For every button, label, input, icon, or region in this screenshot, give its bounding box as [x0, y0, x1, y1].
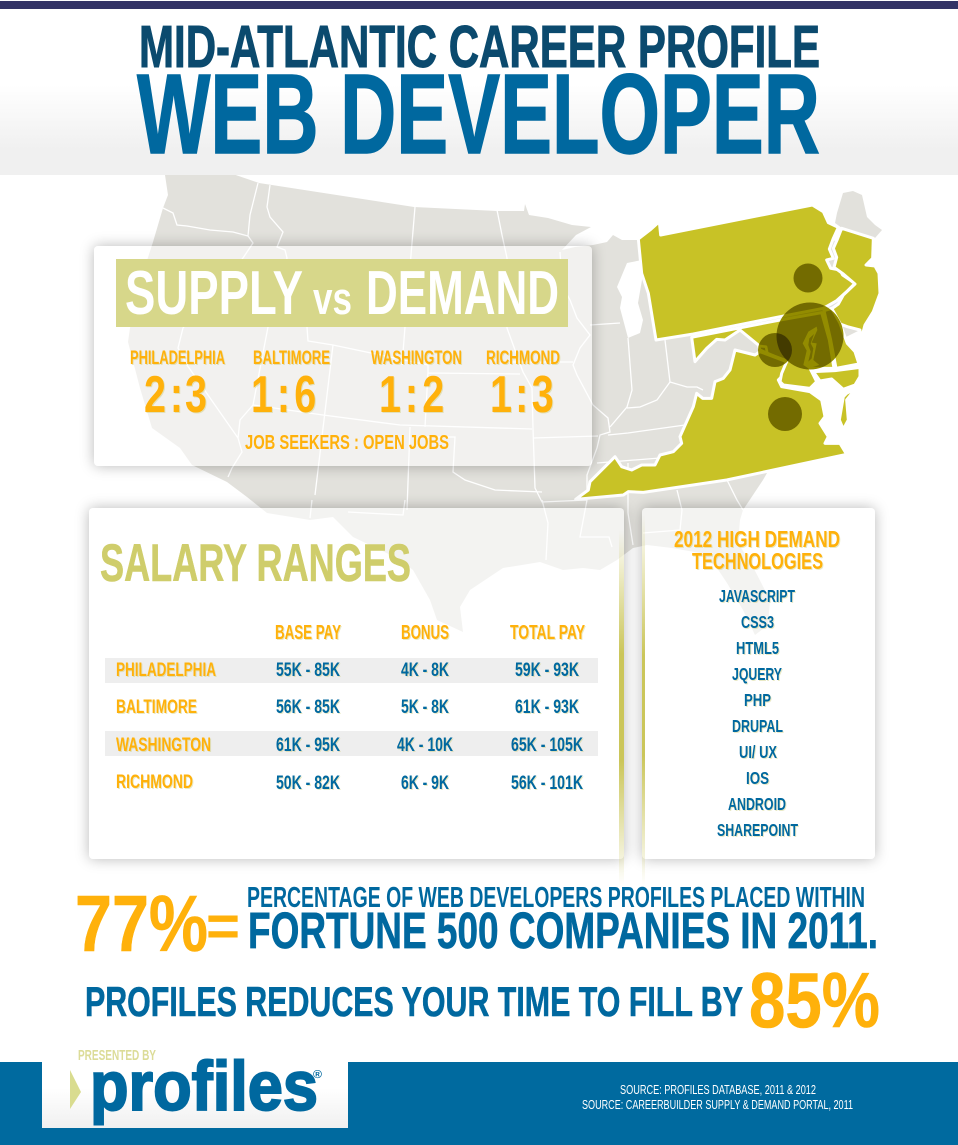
heading bar: SUPPLY: [125, 259, 303, 328]
salary table: BASE PAY: [275, 622, 341, 644]
heading: TECHNOLOGIES: [692, 548, 823, 574]
logo box: [42, 1062, 348, 1128]
presented by logo: ®: [313, 1069, 322, 1081]
salary table: 65K - 105K: [511, 735, 583, 756]
salary table: 61K - 93K: [515, 697, 579, 718]
technology list: JQUERY: [732, 664, 782, 684]
stat: 77 percent: [75, 879, 878, 968]
source notes: SOURCE: PROFILES DATABASE, 2011 & 2012: [620, 1082, 816, 1097]
stat: 85 percent: [85, 956, 880, 1044]
stat: 85 percent: 85%: [749, 956, 880, 1044]
panel: salary ranges: [89, 508, 624, 859]
salary table: 59K - 93K: [515, 660, 579, 681]
vertical accent lines: [619, 530, 624, 885]
technology list: HTML5: [736, 638, 779, 658]
stat: 77 percent: 77%: [75, 879, 208, 968]
panel: header: [0, 0, 958, 175]
salary table: WASHINGTON: [116, 735, 211, 756]
heading: 2012 HIGH DEMAND: [674, 526, 840, 552]
footer band: [0, 1062, 958, 1145]
technology list: IOS: [746, 768, 769, 788]
city ratios: 1:3: [490, 365, 554, 423]
technology list: CSS3: [741, 612, 774, 632]
panel: high demand technologies: [642, 508, 875, 859]
city ratios: BALTIMORE: [253, 348, 330, 369]
heading bar: vs: [313, 273, 352, 324]
salary table: 55K - 85K: [276, 660, 340, 681]
city ratios: 2:3: [144, 365, 207, 423]
city ratios: RICHMOND: [486, 348, 560, 369]
salary table: 6K - 9K: [401, 773, 449, 794]
title: [136, 14, 820, 177]
technology list: PHP: [744, 690, 771, 710]
city ratios: WASHINGTON: [371, 348, 462, 369]
salary table: TOTAL PAY: [510, 622, 585, 644]
technology list: [717, 586, 798, 840]
salary table: 5K - 8K: [401, 697, 449, 718]
salary table: [105, 622, 598, 794]
salary table: 50K - 82K: [276, 773, 340, 794]
city ratios: 1:2: [379, 365, 444, 423]
city ratios: [130, 348, 560, 423]
salary table: 56K - 101K: [511, 773, 583, 794]
salary table: 56K - 85K: [276, 697, 340, 718]
salary table: RICHMOND: [116, 772, 193, 793]
salary table: 4K - 8K: [401, 660, 449, 681]
presented by logo: PRESENTED BY: [78, 1047, 156, 1064]
source notes: [582, 1082, 853, 1112]
salary table: PHILADELPHIA: [116, 660, 216, 681]
technology list: JAVASCRIPT: [719, 586, 795, 606]
technology list: ANDROID: [728, 794, 786, 814]
ratio legend: JOB SEEKERS : OPEN JOBS: [245, 432, 449, 454]
heading: [674, 526, 840, 574]
heading bar: DEMAND: [366, 259, 559, 328]
presented by logo: profiles: [90, 1047, 318, 1125]
salary table: BALTIMORE: [116, 697, 197, 718]
heading bar: [116, 259, 568, 328]
city ratios: 1:6: [251, 365, 316, 423]
statistics callouts: [75, 879, 880, 1044]
salary table: BONUS: [401, 622, 449, 644]
top colour bar: [0, 1, 958, 9]
heading: SALARY RANGES: [100, 534, 411, 593]
technology list: UI/ UX: [739, 742, 777, 762]
technology list: SHAREPOINT: [717, 820, 798, 840]
salary table: 61K - 95K: [276, 735, 340, 756]
salary table: 4K - 10K: [397, 735, 453, 756]
city ratios: PHILADELPHIA: [130, 348, 225, 369]
stat: 77 percent: =: [206, 894, 240, 959]
technology list: DRUPAL: [732, 716, 783, 736]
panel: supply vs demand: [94, 246, 592, 466]
